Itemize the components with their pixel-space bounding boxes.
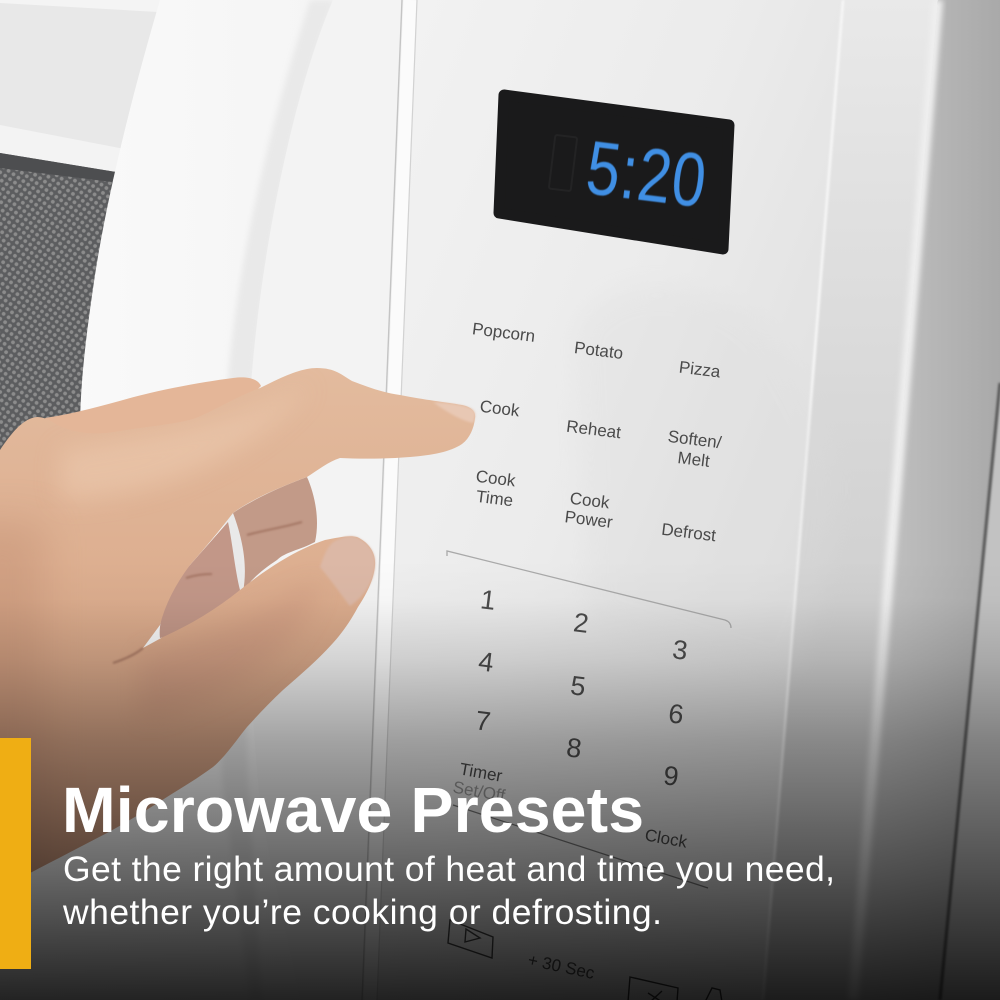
- preset button labels: Pizza: [678, 358, 722, 382]
- thumb shading: [154, 601, 302, 690]
- lower button labels: Timer: [458, 760, 504, 786]
- start button icon: [448, 920, 493, 958]
- number keypad: 1: [479, 584, 497, 616]
- preset button labels: Popcorn: [471, 319, 536, 346]
- lower button labels: Clock: [643, 826, 689, 852]
- number keypad: 2: [572, 607, 590, 639]
- thumbnail: [320, 536, 375, 606]
- preset button labels: Potato: [573, 338, 624, 363]
- mesh window: [0, 153, 116, 470]
- preset button labels: Time: [475, 487, 514, 510]
- title: Microwave Presets: [62, 774, 644, 846]
- preset button labels: Power: [564, 507, 614, 532]
- ghost digit: [549, 135, 577, 191]
- preset button labels: Soften/: [667, 427, 723, 452]
- number keypad: 3: [671, 634, 689, 666]
- number keypad: 7: [474, 705, 492, 737]
- hand: [0, 368, 475, 900]
- preset button labels: Reheat: [565, 417, 622, 442]
- preset button labels: Cook: [475, 467, 517, 490]
- curled middle finger: [233, 477, 317, 592]
- number keypad: 5: [569, 670, 587, 702]
- number keypad: [474, 584, 689, 792]
- curled ring finger: [160, 522, 240, 638]
- preset button labels: Defrost: [660, 520, 717, 545]
- number keypad: 9: [662, 760, 680, 792]
- preset button labels: Melt: [677, 448, 711, 471]
- yellow accent bar: [0, 738, 31, 969]
- palm, index finger and thumb: [0, 368, 475, 888]
- left hand shading: [0, 522, 43, 738]
- divider above keypad: [447, 551, 731, 628]
- finger creases: [113, 522, 302, 663]
- digital display: [499, 95, 729, 249]
- oven interior background: [0, 0, 420, 1000]
- preset button labels: Cook: [479, 397, 521, 420]
- lower button labels: Set/Off: [451, 778, 507, 806]
- hand highlight: [62, 418, 258, 496]
- index fingernail: [433, 402, 475, 423]
- display housing: [499, 95, 729, 249]
- front control panel: [362, 0, 1000, 1000]
- number keypad: 8: [565, 732, 583, 764]
- number keypad: 4: [477, 646, 495, 678]
- lower button labels: [451, 760, 689, 983]
- description text: [62, 849, 835, 932]
- bottom dark gradient overlay: [0, 560, 1000, 1000]
- number keypad: 6: [667, 698, 685, 730]
- back finger: [45, 377, 261, 445]
- hand tonal shading: [0, 418, 302, 730]
- divider below keypad: [453, 805, 708, 888]
- stop button icon: [628, 977, 722, 1000]
- description text: whether you’re cooking or defrosting.: [62, 892, 662, 932]
- reflection on panel: [575, 287, 838, 680]
- preset button labels: [471, 319, 723, 545]
- description text: Get the right amount of heat and time you need,: [63, 849, 835, 889]
- door frame curve: [0, 0, 420, 1000]
- time readout: 5:20: [582, 125, 711, 224]
- preset button labels: Cook: [569, 489, 611, 512]
- lower button labels: + 30 Sec: [526, 950, 597, 983]
